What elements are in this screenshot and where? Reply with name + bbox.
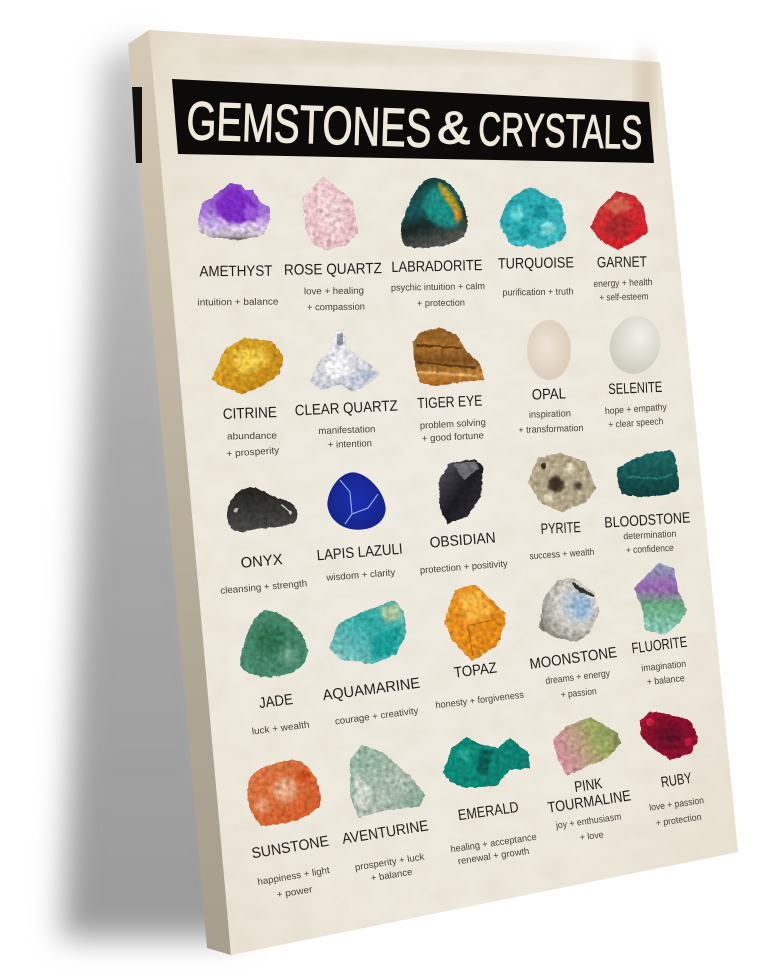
description: onyx: cleansing + strength — [220, 578, 308, 597]
description: turquoise: purification + truth — [502, 286, 574, 299]
card: sunstone — [248, 760, 331, 901]
icon: moonstone — [539, 578, 599, 642]
icon: selenite — [603, 311, 667, 379]
description: garnet: + self-esteem — [599, 291, 649, 304]
label: garnet: GARNET — [597, 254, 647, 271]
icon: rose quartz — [302, 177, 358, 250]
icon: aquamarine — [329, 600, 406, 664]
description: moonstone — [545, 668, 611, 701]
description: emerald: renewal + growth — [457, 846, 530, 867]
label: aquamarine: AQUAMARINE — [322, 675, 421, 704]
label: fluorite: FLUORITE — [631, 634, 688, 657]
description: pink tourmaline: joy + enthusiasm — [554, 811, 622, 832]
description: lapis lazuli: wisdom + clarity — [325, 567, 396, 584]
description: fluorite — [641, 659, 687, 688]
icon: pyrite — [528, 453, 596, 512]
description: clear quartz: manifestation — [318, 424, 376, 437]
description: selenite — [605, 402, 667, 431]
description: jade: luck + wealth — [251, 720, 310, 738]
card: turquoise — [498, 188, 574, 299]
card: amethyst — [197, 183, 279, 308]
icon: lapis lazuli — [327, 472, 386, 530]
description: topaz: honesty + forgiveness — [435, 690, 525, 711]
label: ruby: RUBY — [660, 770, 693, 791]
canvas spine — [128, 30, 231, 955]
icon: opal — [527, 320, 571, 380]
label: sunstone: SUNSTONE — [250, 833, 330, 862]
label: tiger eye: TIGER EYE — [417, 393, 483, 412]
icon: ruby — [640, 711, 699, 760]
description: opal — [518, 408, 584, 436]
card: aquamarine — [322, 600, 421, 727]
title text: & — [437, 101, 471, 154]
description: rose quartz: + compassion — [307, 302, 365, 313]
description: garnet: energy + health — [593, 277, 653, 290]
icon: emerald — [443, 737, 530, 788]
label: aventurine: AVENTURINE — [341, 817, 430, 848]
description: tiger eye — [420, 417, 486, 445]
label: pink tourmaline: PINK — [573, 775, 603, 796]
card: lapis lazuli — [316, 472, 403, 584]
label: citrine: CITRINE — [223, 404, 277, 423]
card: tiger eye — [413, 328, 486, 445]
label: moonstone: MOONSTONE — [529, 644, 618, 673]
label: rose quartz: ROSE QUARTZ — [284, 260, 382, 279]
card: selenite — [603, 311, 667, 431]
description: rose quartz — [304, 286, 365, 313]
description: selenite: hope + empathy — [605, 402, 667, 417]
icon: labradorite — [401, 178, 468, 248]
label: jade: JADE — [258, 691, 294, 712]
description: pink tourmaline: + love — [579, 830, 604, 843]
description: moonstone: + passion — [560, 686, 597, 701]
description: moonstone: dreams + energy — [545, 668, 611, 687]
description: sunstone: happiness + light — [257, 865, 331, 888]
description: labradorite: + protection — [417, 298, 465, 309]
label: labradorite: LABRADORITE — [391, 257, 483, 276]
description: bloodstone: determination — [623, 529, 677, 542]
title banner — [172, 79, 654, 163]
description: garnet — [593, 277, 653, 304]
card: onyx — [220, 487, 308, 597]
label: pyrite: PYRITE — [540, 519, 581, 538]
label: pink tourmaline — [547, 775, 632, 817]
description: aquamarine: courage + creativity — [334, 706, 419, 727]
card: labradorite — [391, 178, 485, 309]
card: clear quartz — [294, 330, 398, 451]
description: rose quartz: love + healing — [304, 286, 364, 297]
canvas front panel — [149, 30, 738, 955]
icon: jade — [240, 610, 308, 677]
description: pink tourmaline — [554, 811, 622, 843]
label: emerald: EMERALD — [457, 799, 520, 824]
description: bloodstone — [623, 529, 677, 556]
label: amethyst: AMETHYST — [199, 263, 273, 280]
icon: citrine — [212, 338, 283, 394]
card: pyrite — [528, 453, 596, 562]
icon: tiger eye — [413, 328, 484, 386]
icon: pink tourmaline — [553, 717, 621, 775]
description: citrine — [226, 431, 280, 460]
description: amethyst: intuition + balance — [197, 297, 279, 308]
label: bloodstone: BLOODSTONE — [604, 509, 691, 532]
description: ruby — [649, 795, 705, 829]
label: lapis lazuli: LAPIS LAZULI — [316, 541, 403, 564]
card: aventurine — [341, 745, 430, 884]
description: citrine: + prosperity — [226, 445, 280, 460]
description: sunstone: + power — [276, 884, 313, 901]
icon: turquoise — [500, 188, 566, 248]
description: ruby: + protection — [655, 812, 702, 829]
label: selenite: SELENITE — [608, 379, 663, 398]
description: sunstone — [257, 865, 331, 901]
icon: fluorite — [634, 563, 687, 635]
icon: topaz — [444, 584, 505, 661]
label: topaz: TOPAZ — [453, 659, 498, 682]
icon: onyx — [227, 487, 297, 532]
description: tiger eye: problem solving — [420, 417, 486, 432]
description: labradorite — [391, 281, 485, 309]
label: onyx: ONYX — [240, 551, 283, 572]
description: fluorite: + balance — [646, 673, 685, 688]
title text: CRYSTALS — [478, 102, 643, 159]
description: selenite: + clear speech — [608, 416, 664, 431]
description: ruby: love + passion — [649, 795, 705, 814]
card: opal — [518, 320, 584, 436]
label: pink tourmaline: TOURMALINE — [547, 787, 632, 817]
icon: sunstone — [248, 760, 320, 826]
description: emerald: healing + acceptance — [450, 832, 537, 855]
icon: obsidian — [439, 459, 483, 524]
description: aventurine — [354, 852, 425, 884]
icon: bloodstone — [617, 450, 679, 497]
description: fluorite: imagination — [641, 659, 687, 674]
card: topaz — [435, 584, 525, 711]
card: moonstone — [529, 578, 618, 701]
card: citrine — [212, 338, 283, 460]
icon: garnet — [590, 191, 648, 250]
card: jade — [240, 610, 310, 738]
card: rose quartz — [284, 177, 382, 313]
card: emerald — [443, 737, 537, 867]
canvas drop shadow — [62, 38, 240, 938]
icon: aventurine — [350, 745, 425, 818]
description: aventurine: prosperity + luck — [354, 852, 425, 873]
description: opal: inspiration — [529, 408, 571, 421]
description: aventurine: + balance — [370, 867, 413, 884]
icon: clear quartz — [310, 330, 381, 392]
card: fluorite — [631, 563, 688, 688]
card: ruby — [640, 711, 705, 829]
description: opal: + transformation — [518, 423, 584, 436]
description: pyrite: success + wealth — [529, 547, 595, 562]
label: obsidian: OBSIDIAN — [429, 529, 496, 552]
description: emerald — [450, 832, 537, 867]
description: labradorite: psychic intuition + calm — [391, 281, 485, 294]
icon: amethyst — [198, 183, 270, 240]
description: bloodstone: + confidence — [626, 543, 674, 556]
description: clear quartz: + intention — [328, 438, 372, 451]
label: clear quartz: CLEAR QUARTZ — [294, 397, 398, 420]
description: tiger eye: + good fortune — [422, 430, 484, 445]
description: citrine: abundance — [227, 431, 277, 442]
card: obsidian — [420, 459, 508, 576]
card: garnet — [590, 191, 653, 304]
card: pink tourmaline — [547, 717, 632, 843]
card: bloodstone — [604, 450, 691, 556]
description: obsidian: protection + positivity — [420, 559, 508, 576]
title text: GEMSTONES — [186, 91, 432, 159]
label: opal: OPAL — [532, 385, 566, 404]
label: turquoise: TURQUOISE — [498, 254, 574, 273]
description: clear quartz — [318, 424, 376, 451]
